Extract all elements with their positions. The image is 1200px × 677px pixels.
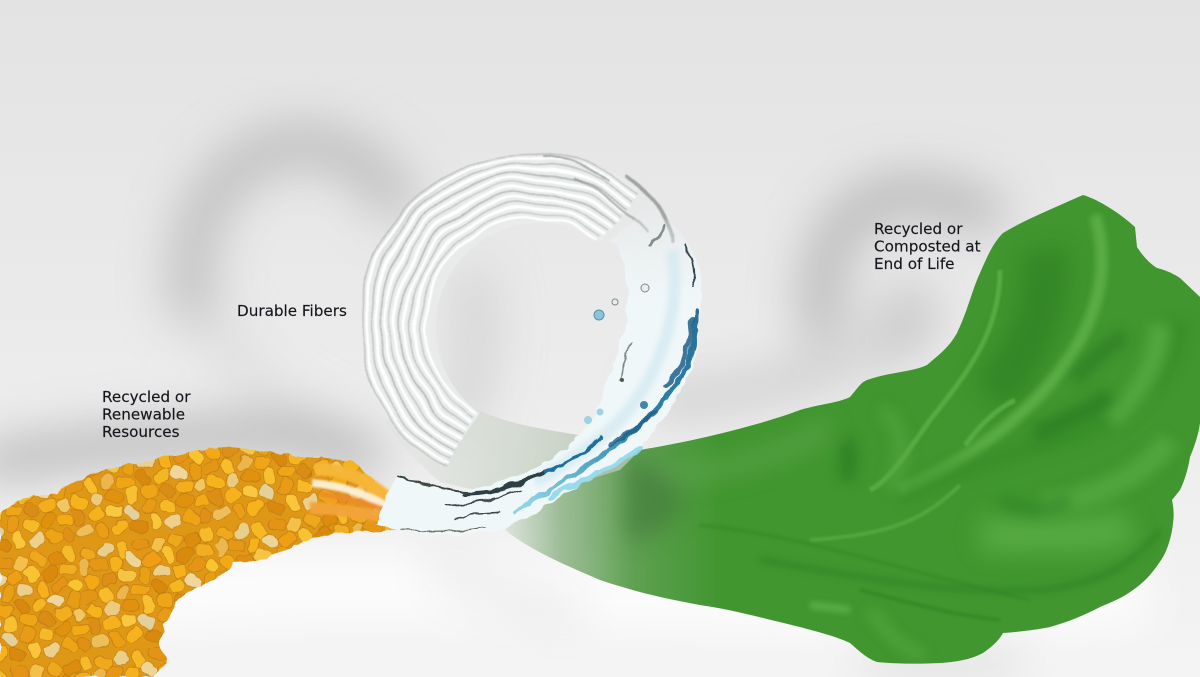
label: recycled or renewable resources: Recycled or	[102, 388, 191, 406]
water droplets	[584, 284, 649, 424]
label: recycled or composted at end of life: Composted at	[874, 238, 981, 256]
label: recycled or renewable resources: Resources	[102, 423, 180, 441]
water ring body	[403, 190, 620, 440]
label: recycled or renewable resources: Renewable	[102, 406, 185, 424]
splash body	[375, 205, 701, 535]
fabric shading folds	[625, 215, 1180, 655]
blue outer edge and dark streaks	[397, 225, 696, 531]
label: recycled or composted at end of life: Recycled or	[874, 220, 963, 238]
corn melting highlights	[310, 470, 395, 518]
corn stream	[0, 448, 410, 677]
background shadows	[0, 145, 1150, 664]
label: recycled or composted at end of life: End of Life	[874, 255, 955, 273]
water splash with blue edge	[375, 205, 701, 535]
flowing strands	[362, 153, 672, 468]
panel: green fabric (end of life)	[505, 195, 1200, 664]
label: durable fibers: Durable Fibers	[237, 302, 347, 320]
band fading into fabric	[385, 397, 640, 500]
panel: durable fibers (water ring)	[362, 153, 672, 500]
panel: recycled or renewable resources (corn)	[0, 448, 410, 677]
soft blue inner wash	[535, 250, 675, 482]
fabric silhouette	[505, 195, 1200, 664]
